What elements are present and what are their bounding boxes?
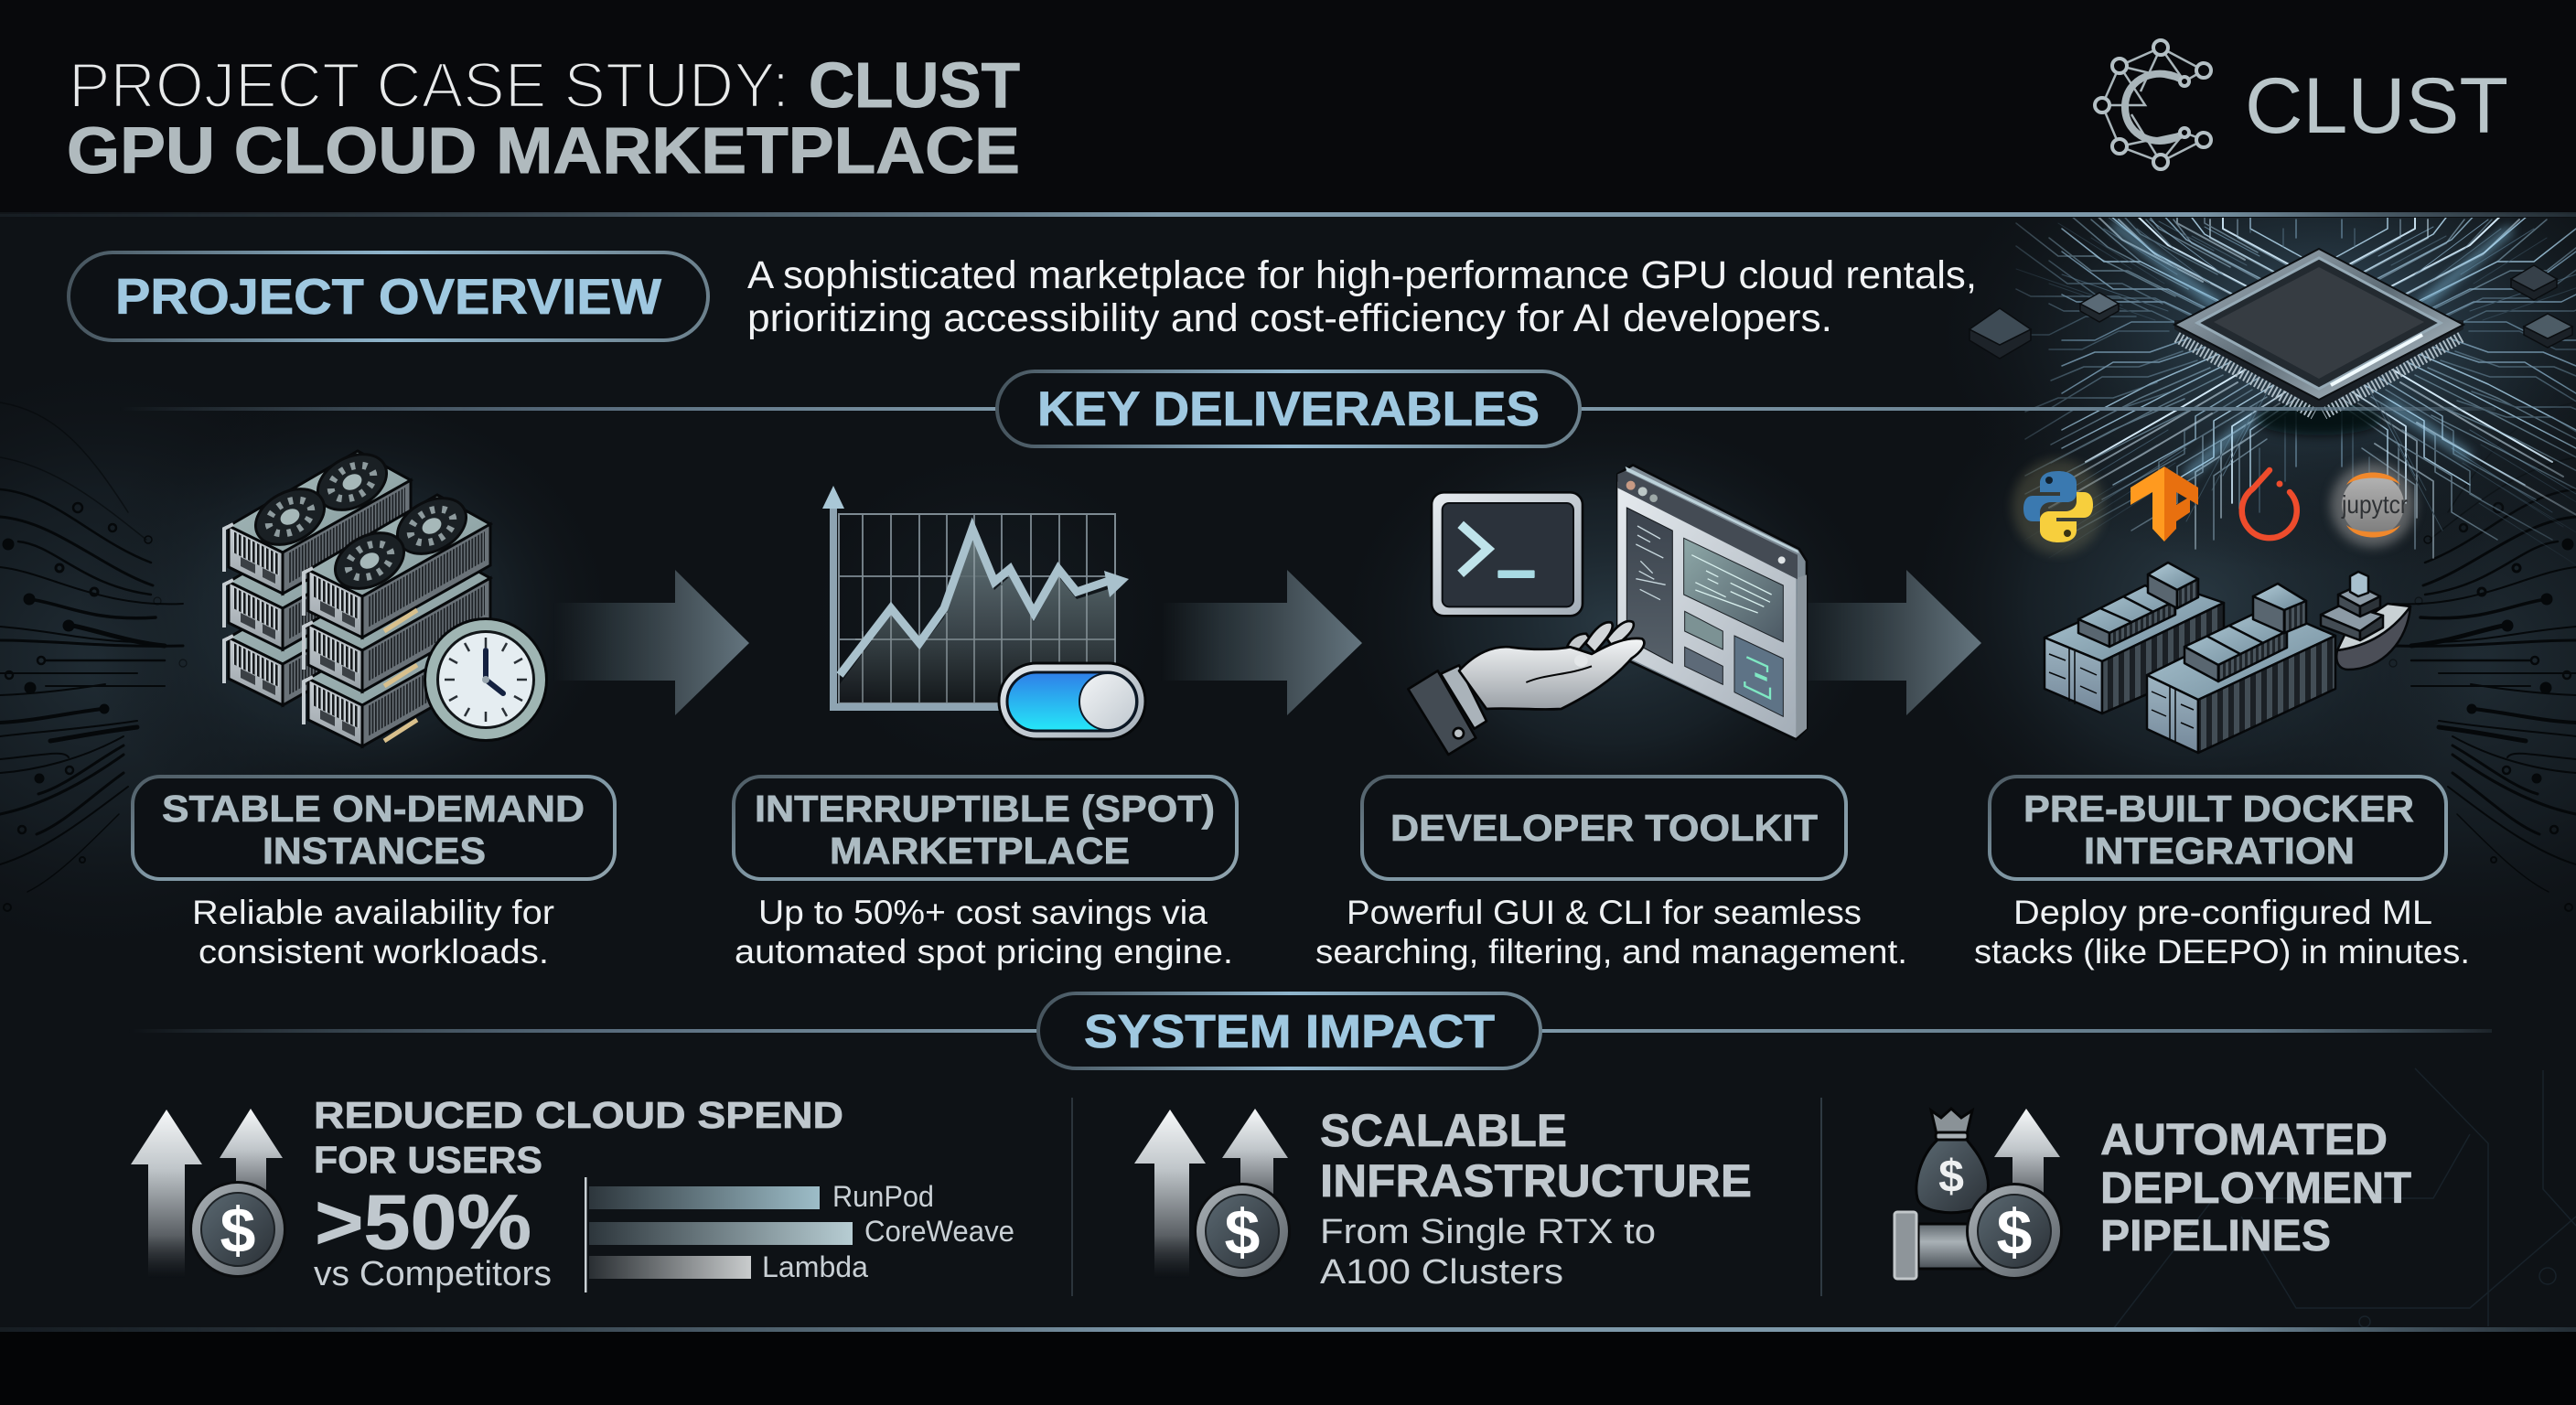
pytorch logo: [2242, 470, 2297, 538]
arrow 1: [553, 570, 749, 715]
deliverable 3: description: searching, filtering, and management.: [1315, 933, 1907, 971]
deliverable 2: description: automated spot pricing engine.: [735, 933, 1233, 971]
impact 2: text: [1320, 1105, 1752, 1292]
logo icon: [2095, 40, 2211, 169]
impact 1: bar chart: RunPod: [832, 1180, 934, 1213]
chart line: [840, 529, 1111, 675]
deliverable 4: label box: [1990, 777, 2446, 879]
deliverable 1: label box: [133, 777, 615, 879]
arrow 3: [1793, 570, 1981, 715]
impact 3: icon money bag, pipe, arrow and coin: [1894, 1109, 2063, 1280]
impact 1: bar chart: Lambda: [762, 1250, 868, 1283]
heading: system impact: SYSTEM IMPACT: [1084, 1005, 1495, 1057]
money bag: $: [1938, 1151, 1964, 1202]
ship: [2321, 572, 2410, 670]
title: GPU CLOUD MARKETPLACE: [67, 115, 1020, 188]
deliverable 3: description: [1315, 894, 1907, 971]
deliverable 3: label box: [1362, 777, 1846, 879]
chart grid: [839, 514, 1115, 702]
title: [67, 49, 1020, 188]
container front: [2147, 584, 2335, 753]
divider: [1820, 1098, 1822, 1296]
deliverable 1: description: Reliable availability for: [192, 894, 554, 931]
pipe: [1894, 1212, 1984, 1279]
impact 1: text: [314, 1094, 843, 1293]
impact 3: text: AUTOMATED: [2100, 1116, 2388, 1164]
impact 2: text: A100 Clusters: [1320, 1253, 1563, 1292]
deliverable 2: description: Up to 50%+ cost savings via: [758, 894, 1208, 931]
terminal: [1432, 492, 1583, 616]
impact 2: icon arrows and coin: [1134, 1109, 1291, 1280]
impact 1: text: vs Competitors: [314, 1255, 552, 1293]
deliverable 4: label box: INTEGRATION: [2084, 830, 2355, 872]
impact 3: text: [2100, 1116, 2411, 1260]
icon: price chart with toggle: [822, 486, 1145, 739]
circuit board with GPU chip: [1970, 218, 2576, 565]
impact 1: text: REDUCED CLOUD SPEND: [314, 1094, 843, 1136]
jupyter logo: [2331, 463, 2415, 547]
impact 2: text: SCALABLE: [1320, 1105, 1567, 1156]
container back: [2045, 563, 2224, 713]
chart axes: [833, 509, 1002, 707]
toggle: [999, 663, 1145, 739]
small chips: [1970, 265, 2572, 359]
logo text: CLUST: [2245, 62, 2508, 150]
decorative circuit lines: right: [2389, 402, 2576, 911]
heading: key deliverables: KEY DELIVERABLES: [1037, 382, 1540, 436]
overview heading: PROJECT OVERVIEW: [115, 268, 661, 325]
deliverable 2: label box: INTERRUPTIBLE (SPOT): [755, 788, 1215, 830]
panel: project overview: [69, 252, 708, 340]
money bag: [1916, 1109, 1988, 1213]
arrow 2: [1161, 570, 1362, 715]
arrow: [1994, 1109, 2060, 1226]
impact 3: icon money bag, pipe, arrow and coin: $: [1997, 1196, 2032, 1268]
divider: [1071, 1098, 1073, 1296]
heading: system impact: [128, 993, 2492, 1068]
chip pins: [2177, 337, 2461, 413]
icon: GPU stack with clock: [224, 443, 548, 746]
deliverable 4: description: stacks (like DEEPO) in minutes.: [1974, 933, 2470, 971]
deliverable 3: label box: DEVELOPER TOOLKIT: [1390, 807, 1818, 849]
impact 1: text: FOR USERS: [314, 1139, 542, 1181]
impact 2: text: INFRASTRUCTURE: [1320, 1155, 1752, 1207]
impact 1: bar chart: [585, 1177, 1014, 1292]
deliverable 3: description: Powerful GUI & CLI for seamless: [1347, 894, 1862, 931]
decorative circuit lines: bottom right: [2113, 1068, 2576, 1329]
hand: [1408, 621, 1644, 755]
title: CLUST: [809, 49, 1020, 121]
overview description: [747, 253, 1977, 340]
deliverable 1: description: consistent workloads.: [199, 933, 549, 971]
deliverable 4: description: [1974, 894, 2470, 971]
icon: ML framework logos: [2012, 459, 2415, 554]
decorative circuit lines: left: [0, 402, 187, 911]
deliverable 1: description: [192, 894, 554, 971]
tensorflow logo: [2131, 467, 2198, 542]
impact 1: bar chart: CoreWeave: [864, 1215, 1014, 1248]
deliverable 4: description: Deploy pre-configured ML: [2013, 894, 2432, 931]
deliverable 1: label box: INSTANCES: [263, 830, 486, 872]
title: PROJECT CASE STUDY:: [69, 49, 789, 121]
overview description: A sophisticated marketplace for high-performance GPU cloud rentals,: [747, 253, 1977, 297]
icon: developer toolkit: [1408, 465, 1807, 755]
impact 1: icon arrows and coin: [131, 1109, 286, 1278]
app window: [1617, 465, 1807, 739]
overview description: prioritizing accessibility and cost-efficiency for AI developers.: [747, 296, 1832, 340]
deliverable 1: label box: STABLE ON-DEMAND: [162, 788, 585, 830]
heading: key deliverables: [119, 371, 2496, 446]
chip shadow: [2255, 402, 2383, 435]
chart area: [840, 540, 1114, 702]
deliverable 2: label box: MARKETPLACE: [830, 830, 1130, 872]
deliverable 2: label box: [734, 777, 1237, 879]
header line: [0, 212, 2576, 217]
deliverable 4: label box: PRE-BUILT DOCKER: [2023, 788, 2414, 830]
clock: [424, 617, 548, 742]
footer line: [0, 1327, 2576, 1332]
deliverable 2: description: [735, 894, 1233, 971]
impact 1: icon arrows and coin: $: [220, 1195, 255, 1266]
impact 3: text: DEPLOYMENT: [2100, 1164, 2411, 1213]
overview pill: [69, 252, 708, 340]
jupyter logo: jupytcr: [2341, 490, 2408, 519]
python logo: [2012, 459, 2104, 554]
impact 1: text: >50%: [315, 1179, 531, 1265]
logo: CLUST: [2095, 40, 2508, 169]
icon: docker containers and ship: [2045, 563, 2410, 753]
impact 3: text: PIPELINES: [2100, 1212, 2331, 1260]
impact 2: text: From Single RTX to: [1320, 1213, 1656, 1251]
impact 2: icon arrows and coin: $: [1225, 1196, 1260, 1268]
